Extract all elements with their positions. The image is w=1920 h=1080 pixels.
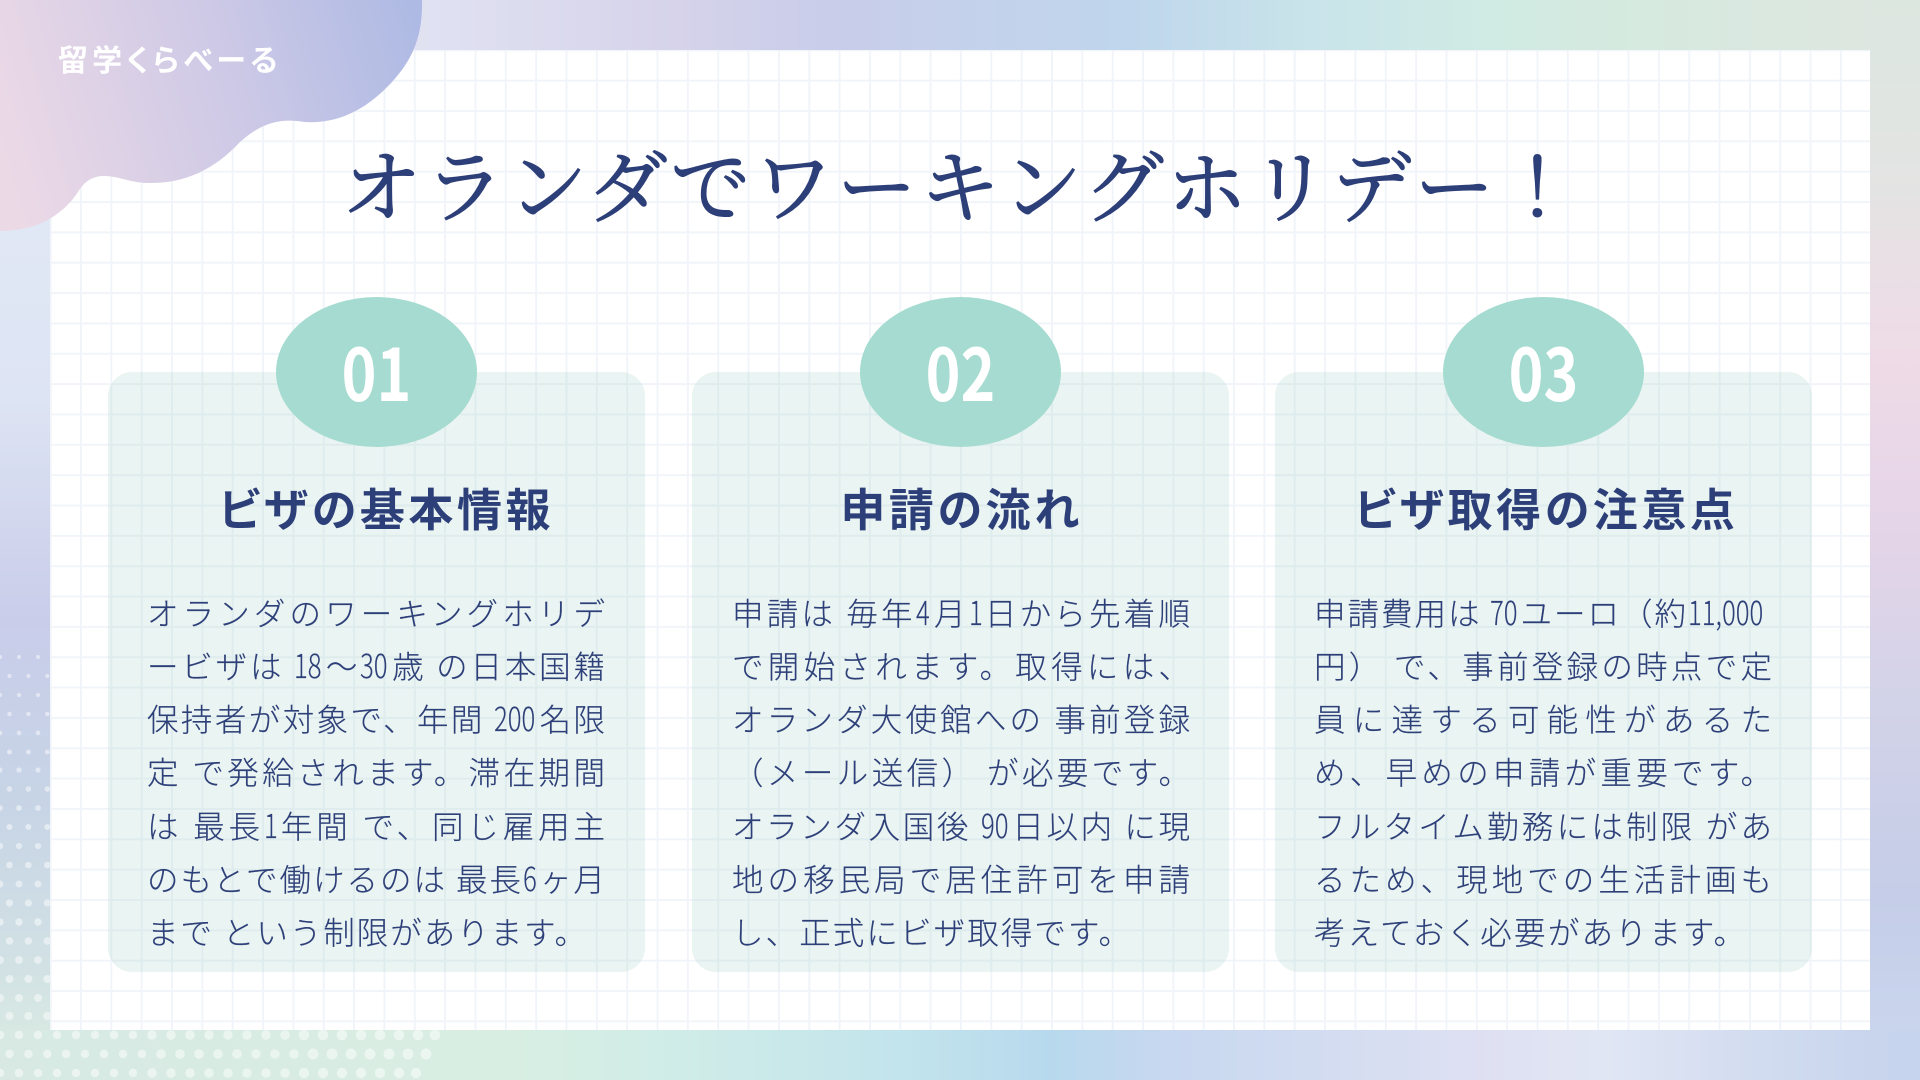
text block: card 1: オランダのワーキングホリデ: [147, 588, 605, 634]
corner blob: [0, 0, 422, 231]
heading: card 3: ビザ取得の注意点: [1354, 474, 1739, 539]
text block: card 3: [1314, 586, 1772, 954]
badge: 03: 03: [1509, 317, 1578, 422]
badge: 02: 02: [925, 317, 995, 422]
panel: card 1 background: [108, 372, 645, 972]
text block: card 3: め、早めの申請が重要です。: [1314, 748, 1772, 794]
text block: card 3: 員に達する可能性があるた: [1314, 695, 1772, 741]
text block: card 3: 円） で、事前登録の時点で定: [1314, 642, 1772, 688]
text block: card 2: [732, 586, 1190, 954]
text block: card 1: のもとで働けるのは 最長 ヶ月: [147, 855, 605, 901]
text block: card 1: 保持者が対象で、年間 名限: [147, 695, 605, 741]
text block: card 2: 申請は 毎年 月 日から先着順: [732, 588, 1190, 634]
text block: card 1: 1: [264, 800, 278, 848]
text block: card 1: 30: [360, 640, 388, 688]
title: オランダでワーキングホリデー！: [341, 146, 1581, 234]
text block: card 2: 90: [981, 800, 1008, 848]
text block: card 2: オランダ入国後 日以内 に現: [732, 802, 1190, 848]
text block: card 3: 考えておく必要があります。: [1314, 908, 1745, 954]
text block: card 3: 70: [1490, 586, 1518, 634]
text block: card 1: ービザは 〜 歳 の日本国籍: [147, 642, 605, 688]
text block: card 2: 4: [916, 586, 930, 634]
text block: card 2: し、正式にビザ取得です。: [732, 908, 1130, 954]
text block: card 1: 6: [523, 853, 537, 901]
text block: card 2: 地の移民局で居住許可を申請: [732, 855, 1190, 901]
text block: card 1: は 最長 年間 で、同じ雇用主: [147, 802, 605, 848]
text block: card 3: フルタイム勤務には制限 があ: [1314, 802, 1772, 848]
text block: card 3: るため、現地での生活計画も: [1314, 855, 1772, 901]
text block: card 2: で開始されます。取得には、: [732, 642, 1190, 688]
text block: card 3: 申請費用は ユーロ（約: [1314, 588, 1688, 634]
text block: card 2: 1: [969, 586, 982, 634]
heading: card 2: 申請の流れ: [840, 474, 1083, 539]
badge: 03: [1443, 297, 1644, 447]
text block: card 2: オランダ大使館への 事前登録: [732, 695, 1190, 741]
badge: 01: [276, 297, 477, 447]
text block: card 1: 200: [494, 693, 535, 741]
badge: 01: 01: [342, 317, 411, 422]
brand label: 留学くらべーる: [58, 36, 282, 80]
badge: 02: [860, 297, 1060, 447]
panel: card 2 background: [692, 372, 1228, 972]
text block: card 1: [147, 588, 605, 954]
heading: card 1: ビザの基本情報: [219, 474, 554, 539]
text block: card 1: まで という制限があります。: [147, 908, 586, 954]
text block: card 1: 定 で発給されます。滞在期間: [147, 748, 605, 794]
text block: card 1: 18: [294, 640, 322, 688]
text block: card 2: （メール送信） が必要です。: [732, 748, 1190, 794]
panel: card 3 background: [1275, 372, 1812, 972]
text block: card 3: 11,000: [1688, 586, 1763, 634]
